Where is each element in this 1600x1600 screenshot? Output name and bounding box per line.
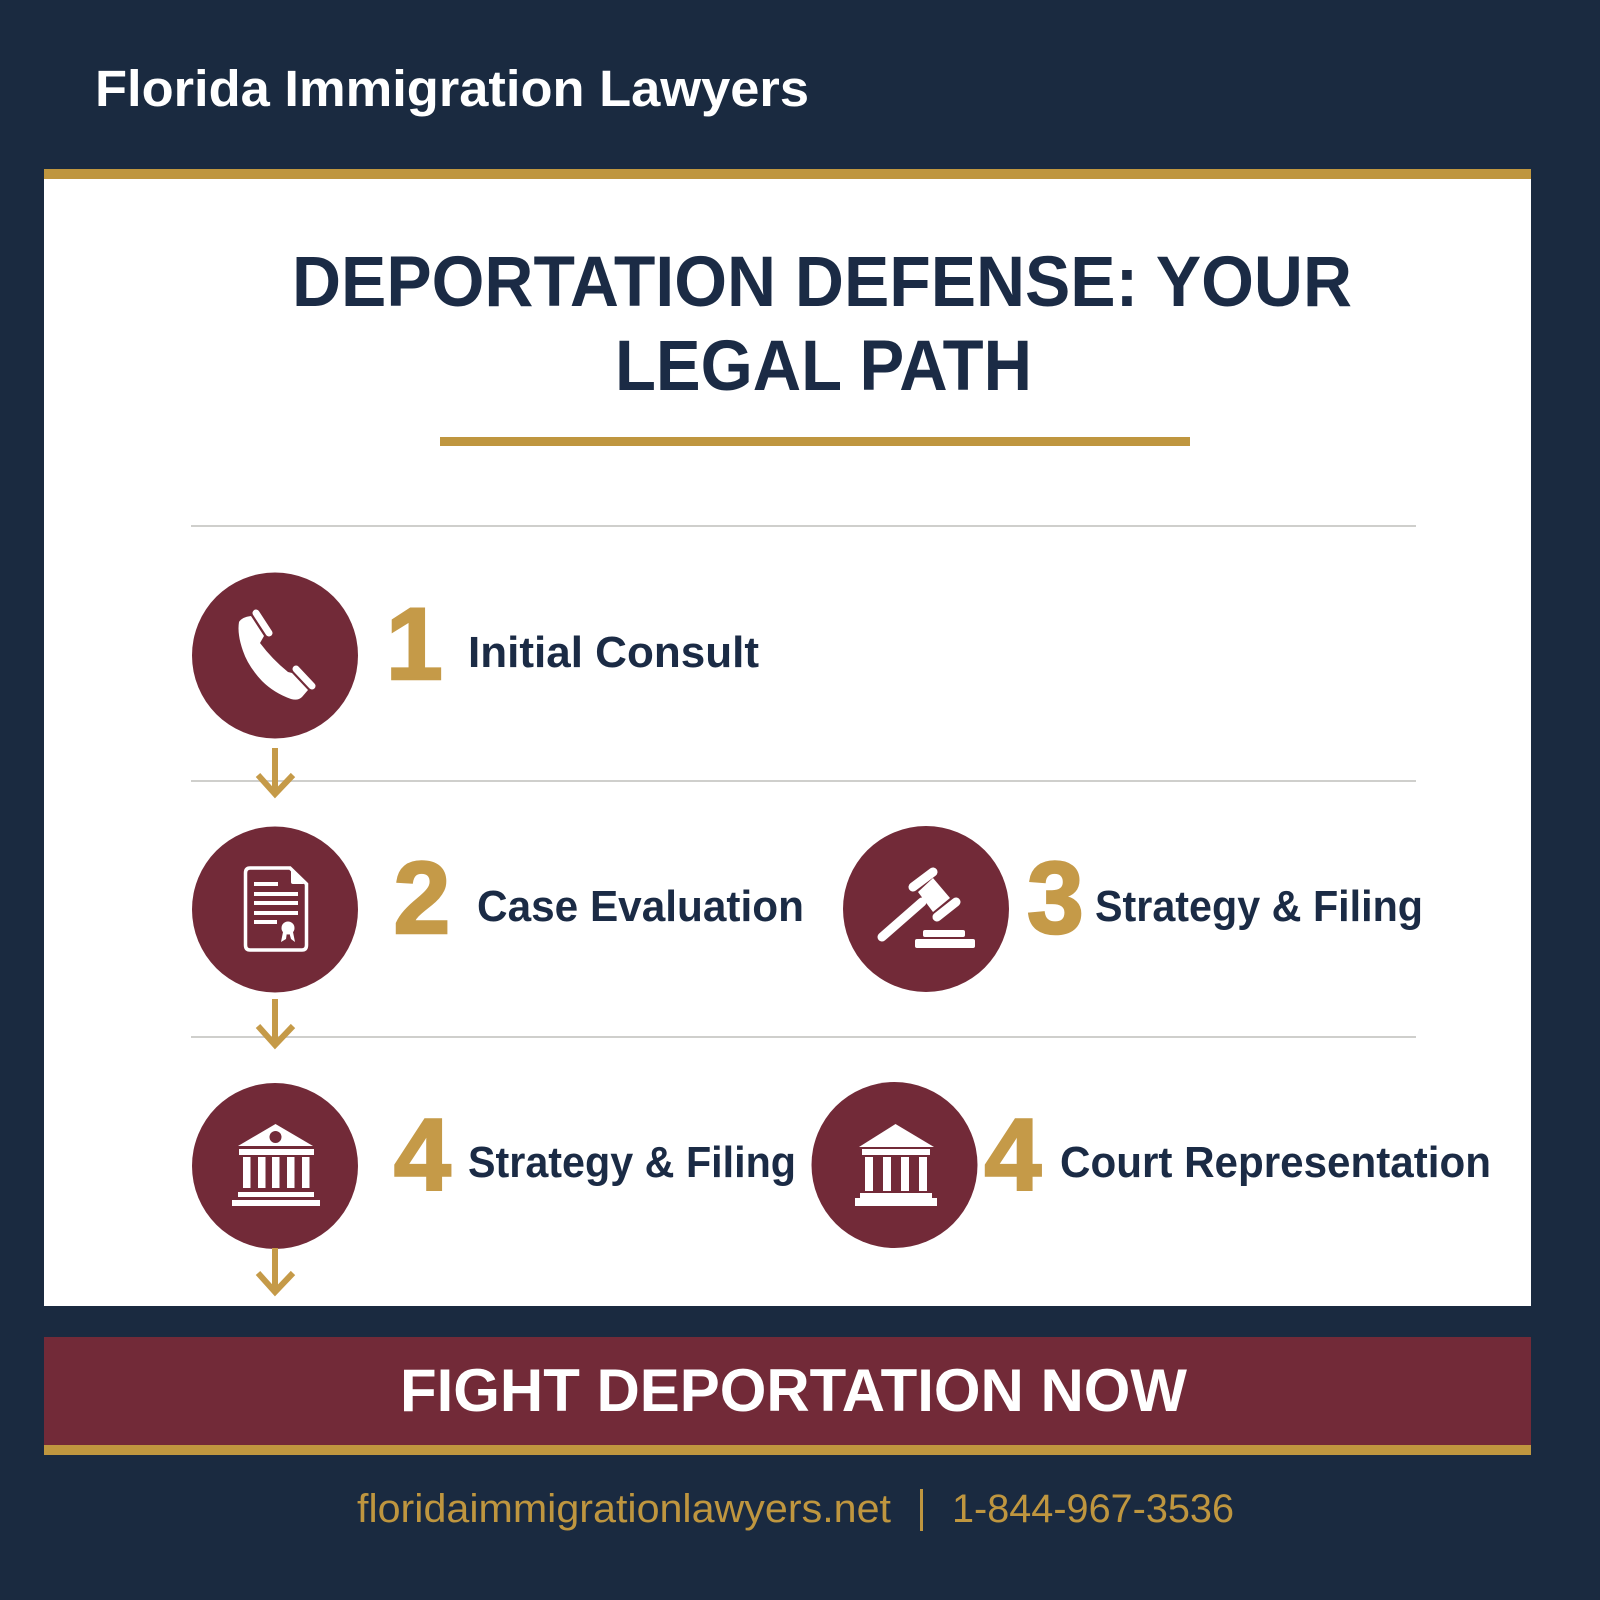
number 3: 3	[1027, 841, 1084, 955]
arrow: step 1 to 2	[258, 748, 293, 794]
step 2: case evaluation	[192, 826, 804, 992]
label: strategy and filing: Strategy & Filing	[468, 1138, 796, 1187]
panel: white content card	[44, 169, 1531, 1306]
icon: phone	[192, 572, 358, 738]
label: case evaluation: Case Evaluation	[477, 882, 804, 931]
arrow: step 4 onward	[258, 1248, 293, 1292]
title underline	[440, 437, 1190, 446]
title: LEGAL PATH	[615, 327, 1032, 406]
title: DEPORTATION DEFENSE: YOUR	[292, 243, 1352, 322]
number 2: 2	[394, 841, 450, 955]
number 4: 4	[984, 1098, 1042, 1212]
number 1: 1	[386, 587, 443, 701]
step 3: strategy and filing	[843, 826, 1423, 992]
icon: document	[192, 826, 358, 992]
footer contact line: 1-844-967-3536	[952, 1487, 1234, 1531]
footer contact line: floridaimmigrationlawyers.net	[357, 1487, 891, 1531]
call to action banner: FIGHT DEPORTATION NOW	[400, 1357, 1187, 1424]
step 1: initial consult	[192, 572, 759, 738]
icon: gavel	[843, 826, 1009, 992]
footer contact line	[357, 1487, 1234, 1531]
label: strategy and filing: Strategy & Filing	[1095, 882, 1423, 931]
label: court representation: Court Representation	[1060, 1138, 1491, 1187]
label: initial consult: Initial Consult	[468, 628, 759, 677]
call to action banner	[44, 1337, 1531, 1455]
step 4: strategy and filing	[192, 1083, 796, 1249]
step 4: court representation	[812, 1082, 1491, 1248]
brand name header: Florida Immigration Lawyers	[95, 60, 809, 117]
arrow: step 2 to 4	[258, 999, 293, 1045]
title	[292, 243, 1352, 406]
icon: courthouse with medallion	[192, 1083, 358, 1249]
number 4: 4	[394, 1098, 451, 1212]
icon: courthouse	[812, 1082, 978, 1248]
